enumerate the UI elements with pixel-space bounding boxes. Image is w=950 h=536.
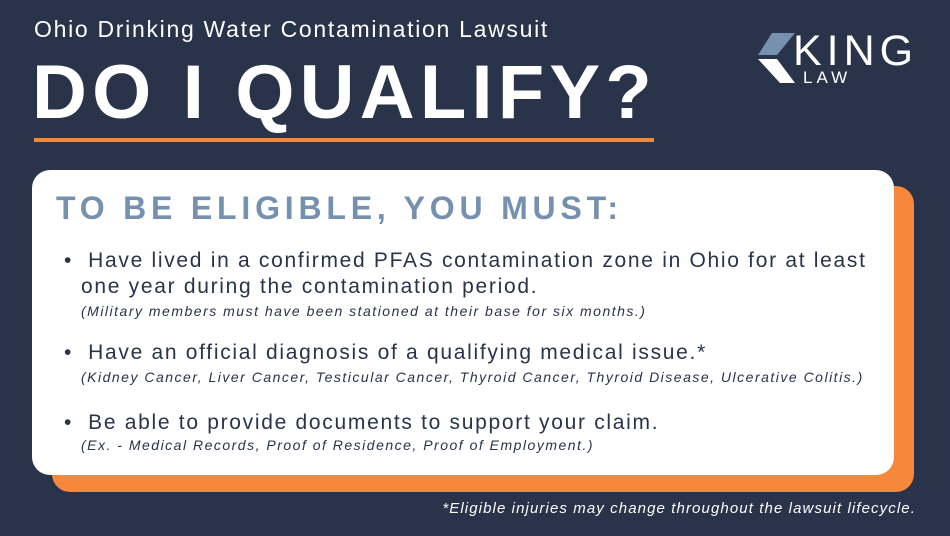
footnote: *Eligible injuries may change throughout the lawsuit lifecycle. — [442, 500, 916, 517]
bullet 2: (Kidney Cancer, Liver Cancer, Testicular Cancer, Thyroid Cancer, Thyroid Disease, Ulcerative Colitis.) — [81, 369, 864, 385]
bullet 3: • Be able to provide documents to support your claim. — [64, 411, 659, 434]
bullet 1: (Military members must have been stationed at their base for six months.) — [81, 303, 646, 319]
bullet 2 — [64, 341, 864, 385]
bullet 2: • Have an official diagnosis of a qualifying medical issue.* — [64, 341, 707, 364]
bullet 3: (Ex. - Medical Records, Proof of Residence, Proof of Employment.) — [81, 437, 594, 453]
title underline — [34, 138, 654, 142]
bullet 1: one year during the contamination period. — [81, 275, 538, 298]
title: DO I QUALIFY? — [32, 50, 657, 135]
bullet 3 — [64, 411, 659, 453]
orange card shadow — [52, 186, 914, 492]
logo — [758, 30, 918, 86]
bullet 1: • Have lived in a confirmed PFAS contamination zone in Ohio for at least — [64, 249, 867, 272]
panel heading: TO BE ELIGIBLE, YOU MUST: — [56, 190, 623, 226]
bullet 1 — [64, 249, 867, 319]
panel: eligibility — [32, 170, 894, 475]
subtitle: Ohio Drinking Water Contamination Lawsuit — [34, 16, 549, 42]
